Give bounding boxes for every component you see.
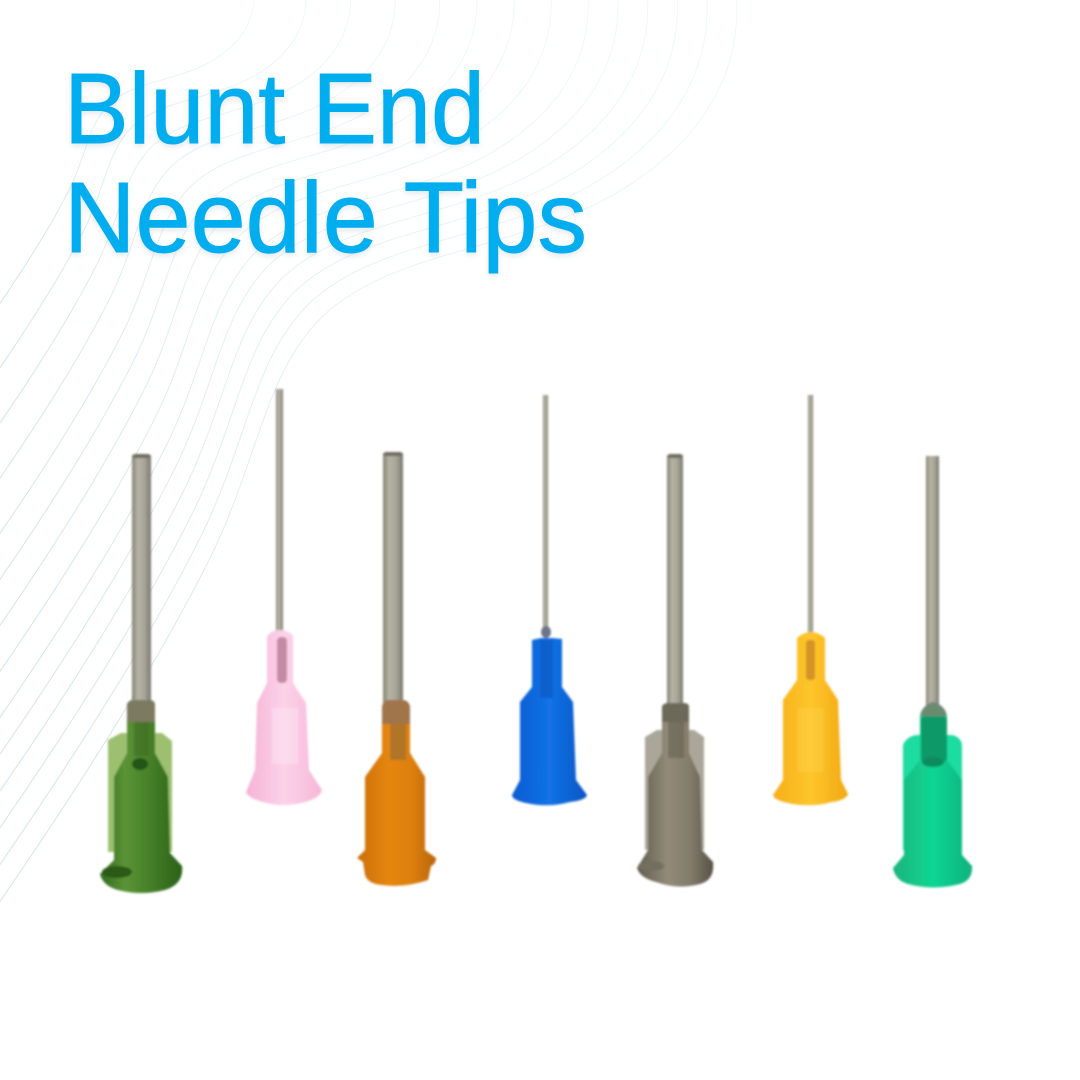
title: Blunt End bbox=[64, 53, 485, 165]
needle: blue bbox=[512, 395, 587, 805]
needle: dark green bbox=[100, 454, 182, 893]
background wave lines bbox=[0, 0, 737, 910]
title bbox=[64, 53, 587, 274]
needle: orange bbox=[357, 452, 436, 886]
title: Needle Tips bbox=[64, 162, 587, 274]
needle tips row bbox=[100, 389, 972, 893]
needle: dark gray bbox=[637, 454, 713, 887]
needle: yellow bbox=[773, 395, 848, 805]
needle: pink bbox=[246, 389, 322, 805]
needle: emerald green bbox=[893, 456, 972, 888]
